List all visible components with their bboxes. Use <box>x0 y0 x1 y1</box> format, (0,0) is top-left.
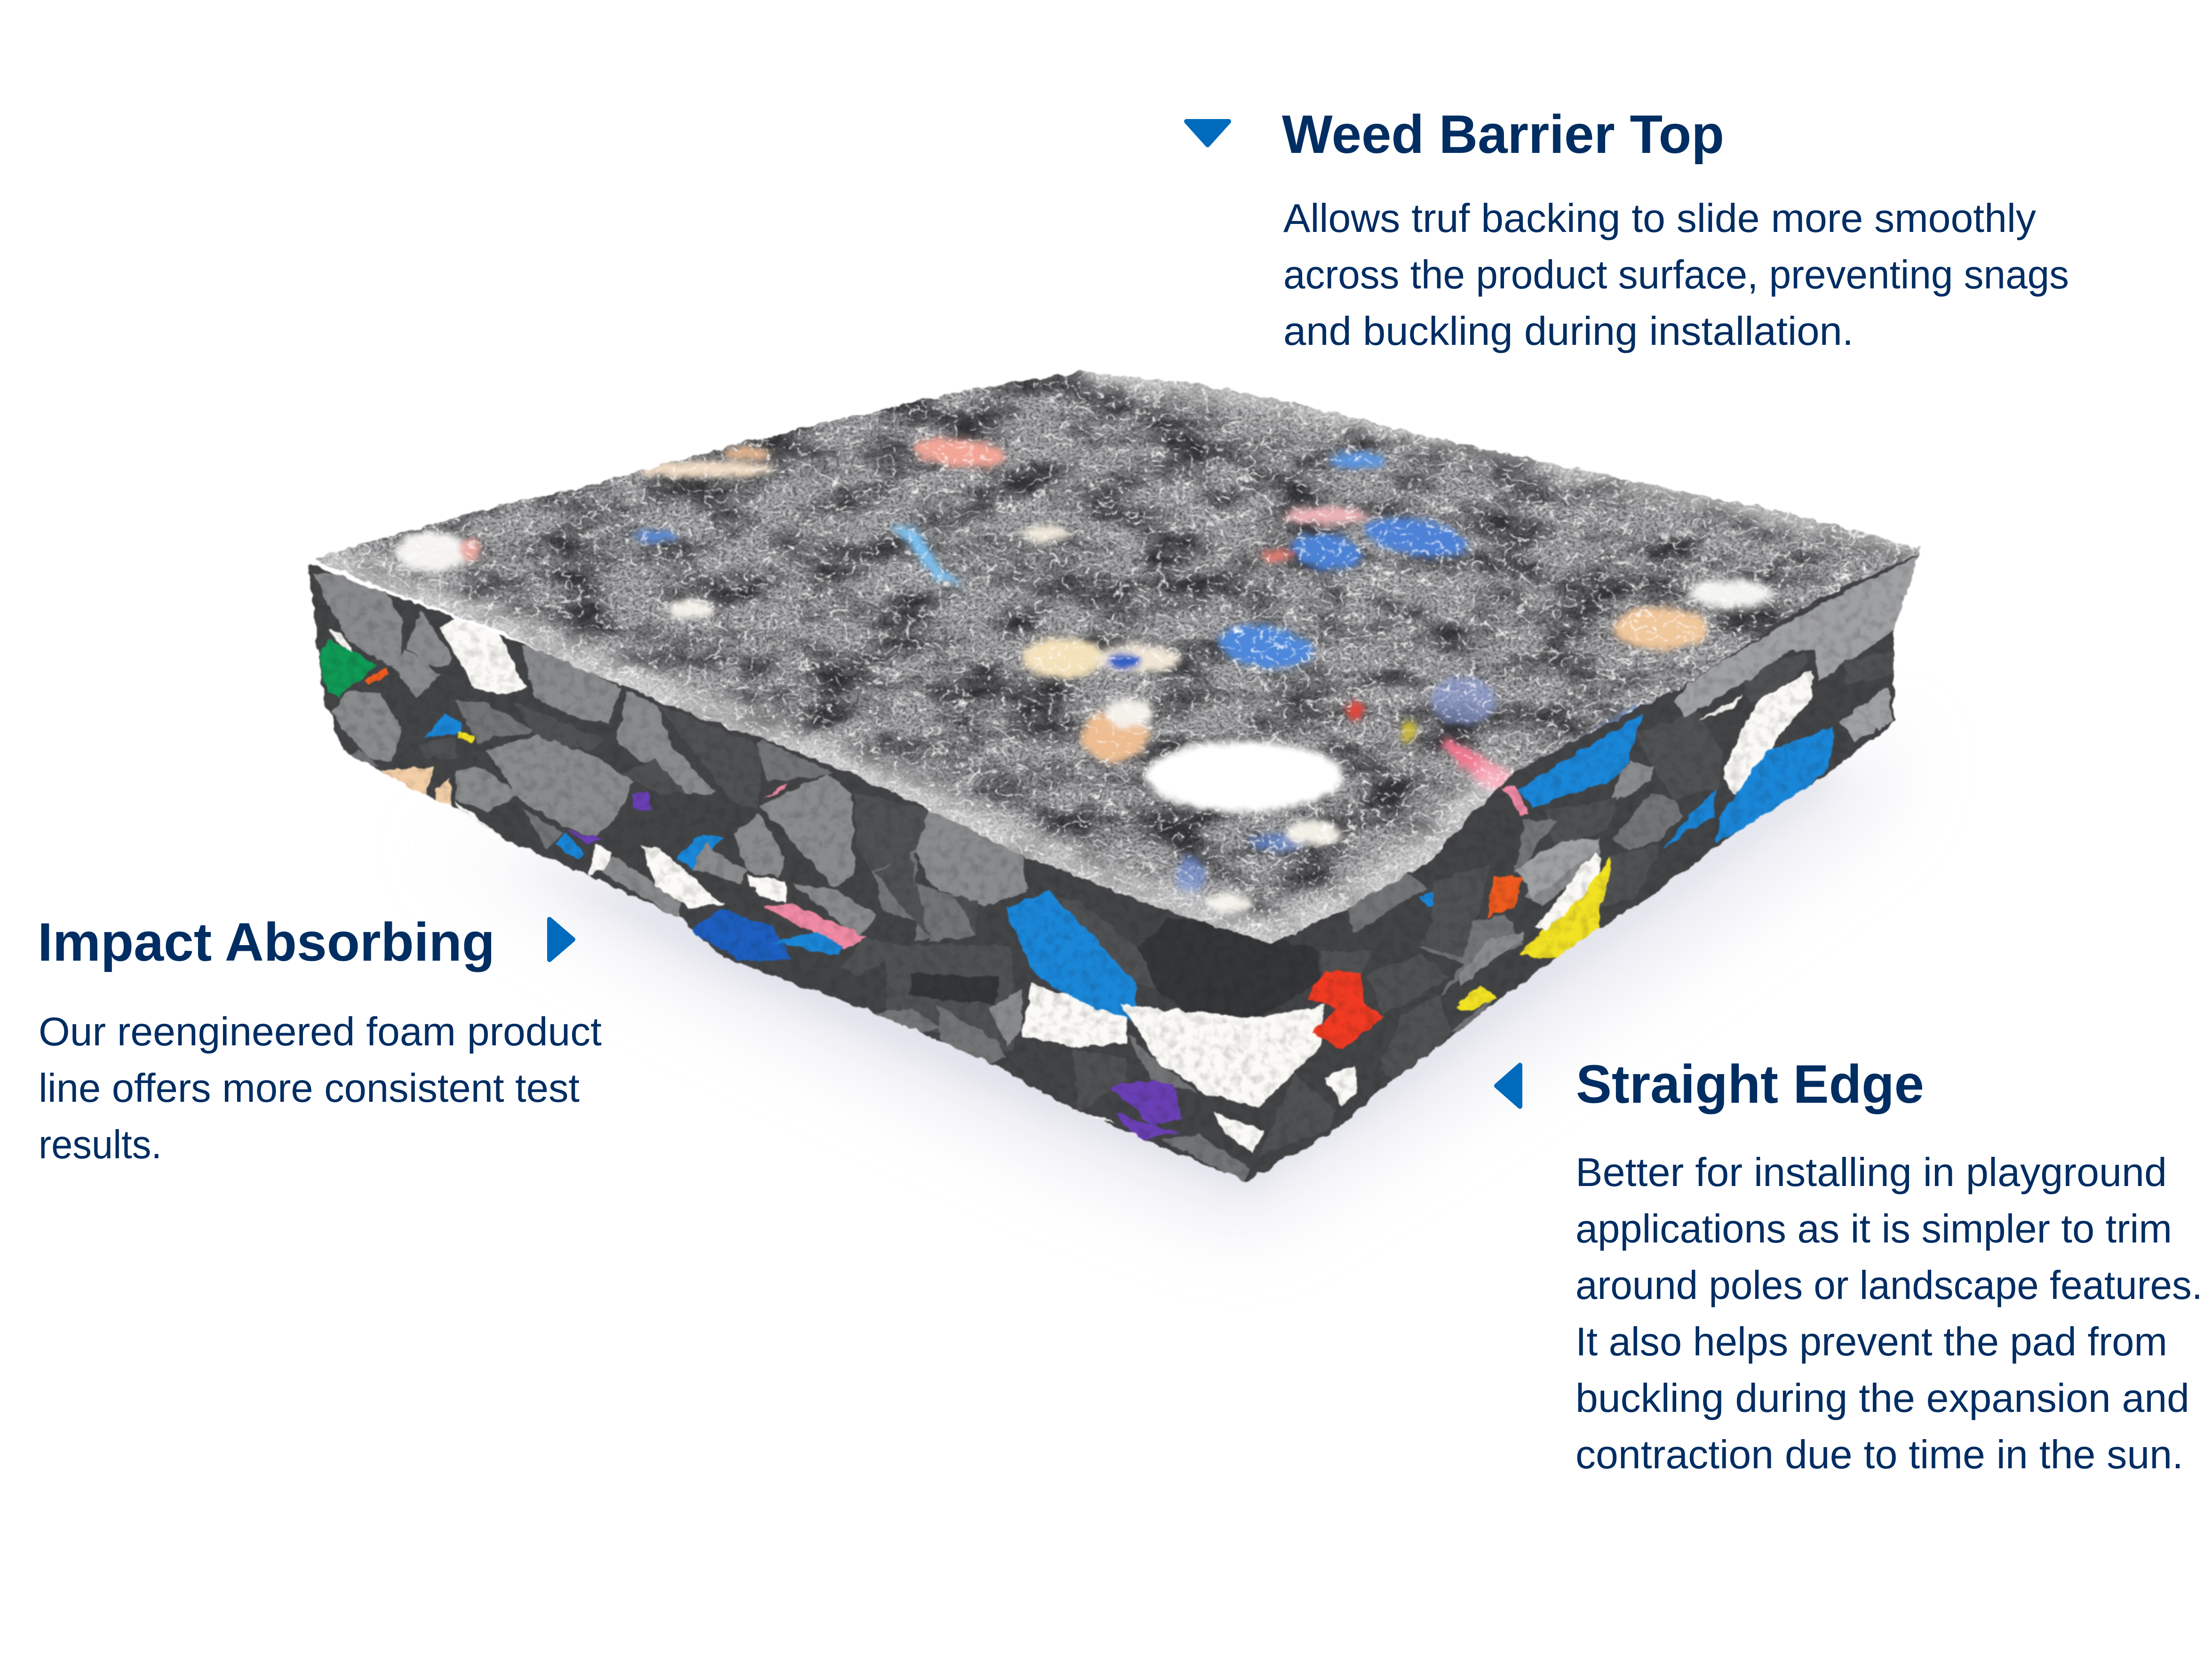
body text: applications as it is simpler to trim <box>1575 1207 2172 1251</box>
foam surface grain <box>308 553 1920 1181</box>
product sample: foam pad <box>282 358 1938 1233</box>
arrow pointing right <box>549 919 573 960</box>
front corner chunks <box>842 810 1599 1181</box>
arrow pointing left <box>1496 1065 1520 1107</box>
body text: Allows truf backing to slide more smoothly <box>1283 196 2036 241</box>
right face chunks <box>1458 556 1919 1011</box>
body text: and buckling during installation. <box>1283 309 1854 354</box>
fibre build-up along front edges <box>313 572 1514 948</box>
arrow pointing down <box>1186 121 1229 145</box>
body text <box>1283 196 2069 354</box>
callout: Weed Barrier Top <box>1186 104 2069 354</box>
callout: Impact Absorbing <box>38 912 602 1167</box>
weed barrier top surface <box>282 358 1938 960</box>
white fibre web <box>282 358 1938 960</box>
body text: results. <box>39 1123 162 1167</box>
body text: Our reengineered foam product <box>39 1010 602 1054</box>
body text: line offers more consistent test <box>39 1066 580 1111</box>
dark mottling <box>282 358 1938 960</box>
body text: buckling during the expansion and <box>1575 1376 2189 1421</box>
body text: It also helps prevent the pad from <box>1575 1320 2167 1364</box>
fine grain <box>282 358 1938 960</box>
left face chunks <box>313 573 1027 961</box>
dark side base <box>308 553 1920 1181</box>
body text: across the product surface, preventing snags <box>1283 253 2069 297</box>
grey fleece base <box>282 358 1938 960</box>
callout: Straight Edge <box>1496 1054 2203 1477</box>
faded upper right edge <box>1082 367 1919 546</box>
body text: contraction due to time in the sun. <box>1575 1433 2183 1477</box>
body text <box>39 1010 602 1167</box>
heading: Straight Edge <box>1576 1054 1924 1115</box>
soft shadow under pad <box>423 734 1905 1233</box>
body text: around poles or landscape features. <box>1575 1263 2203 1308</box>
foam side faces with rebonded chunks <box>308 553 1920 1181</box>
heading: Impact Absorbing <box>38 912 495 972</box>
heading: Weed Barrier Top <box>1282 104 1724 165</box>
body text: Better for installing in playground <box>1575 1150 2167 1195</box>
body text <box>1575 1150 2203 1477</box>
embedded foam patches seen through fleece <box>396 434 1774 913</box>
